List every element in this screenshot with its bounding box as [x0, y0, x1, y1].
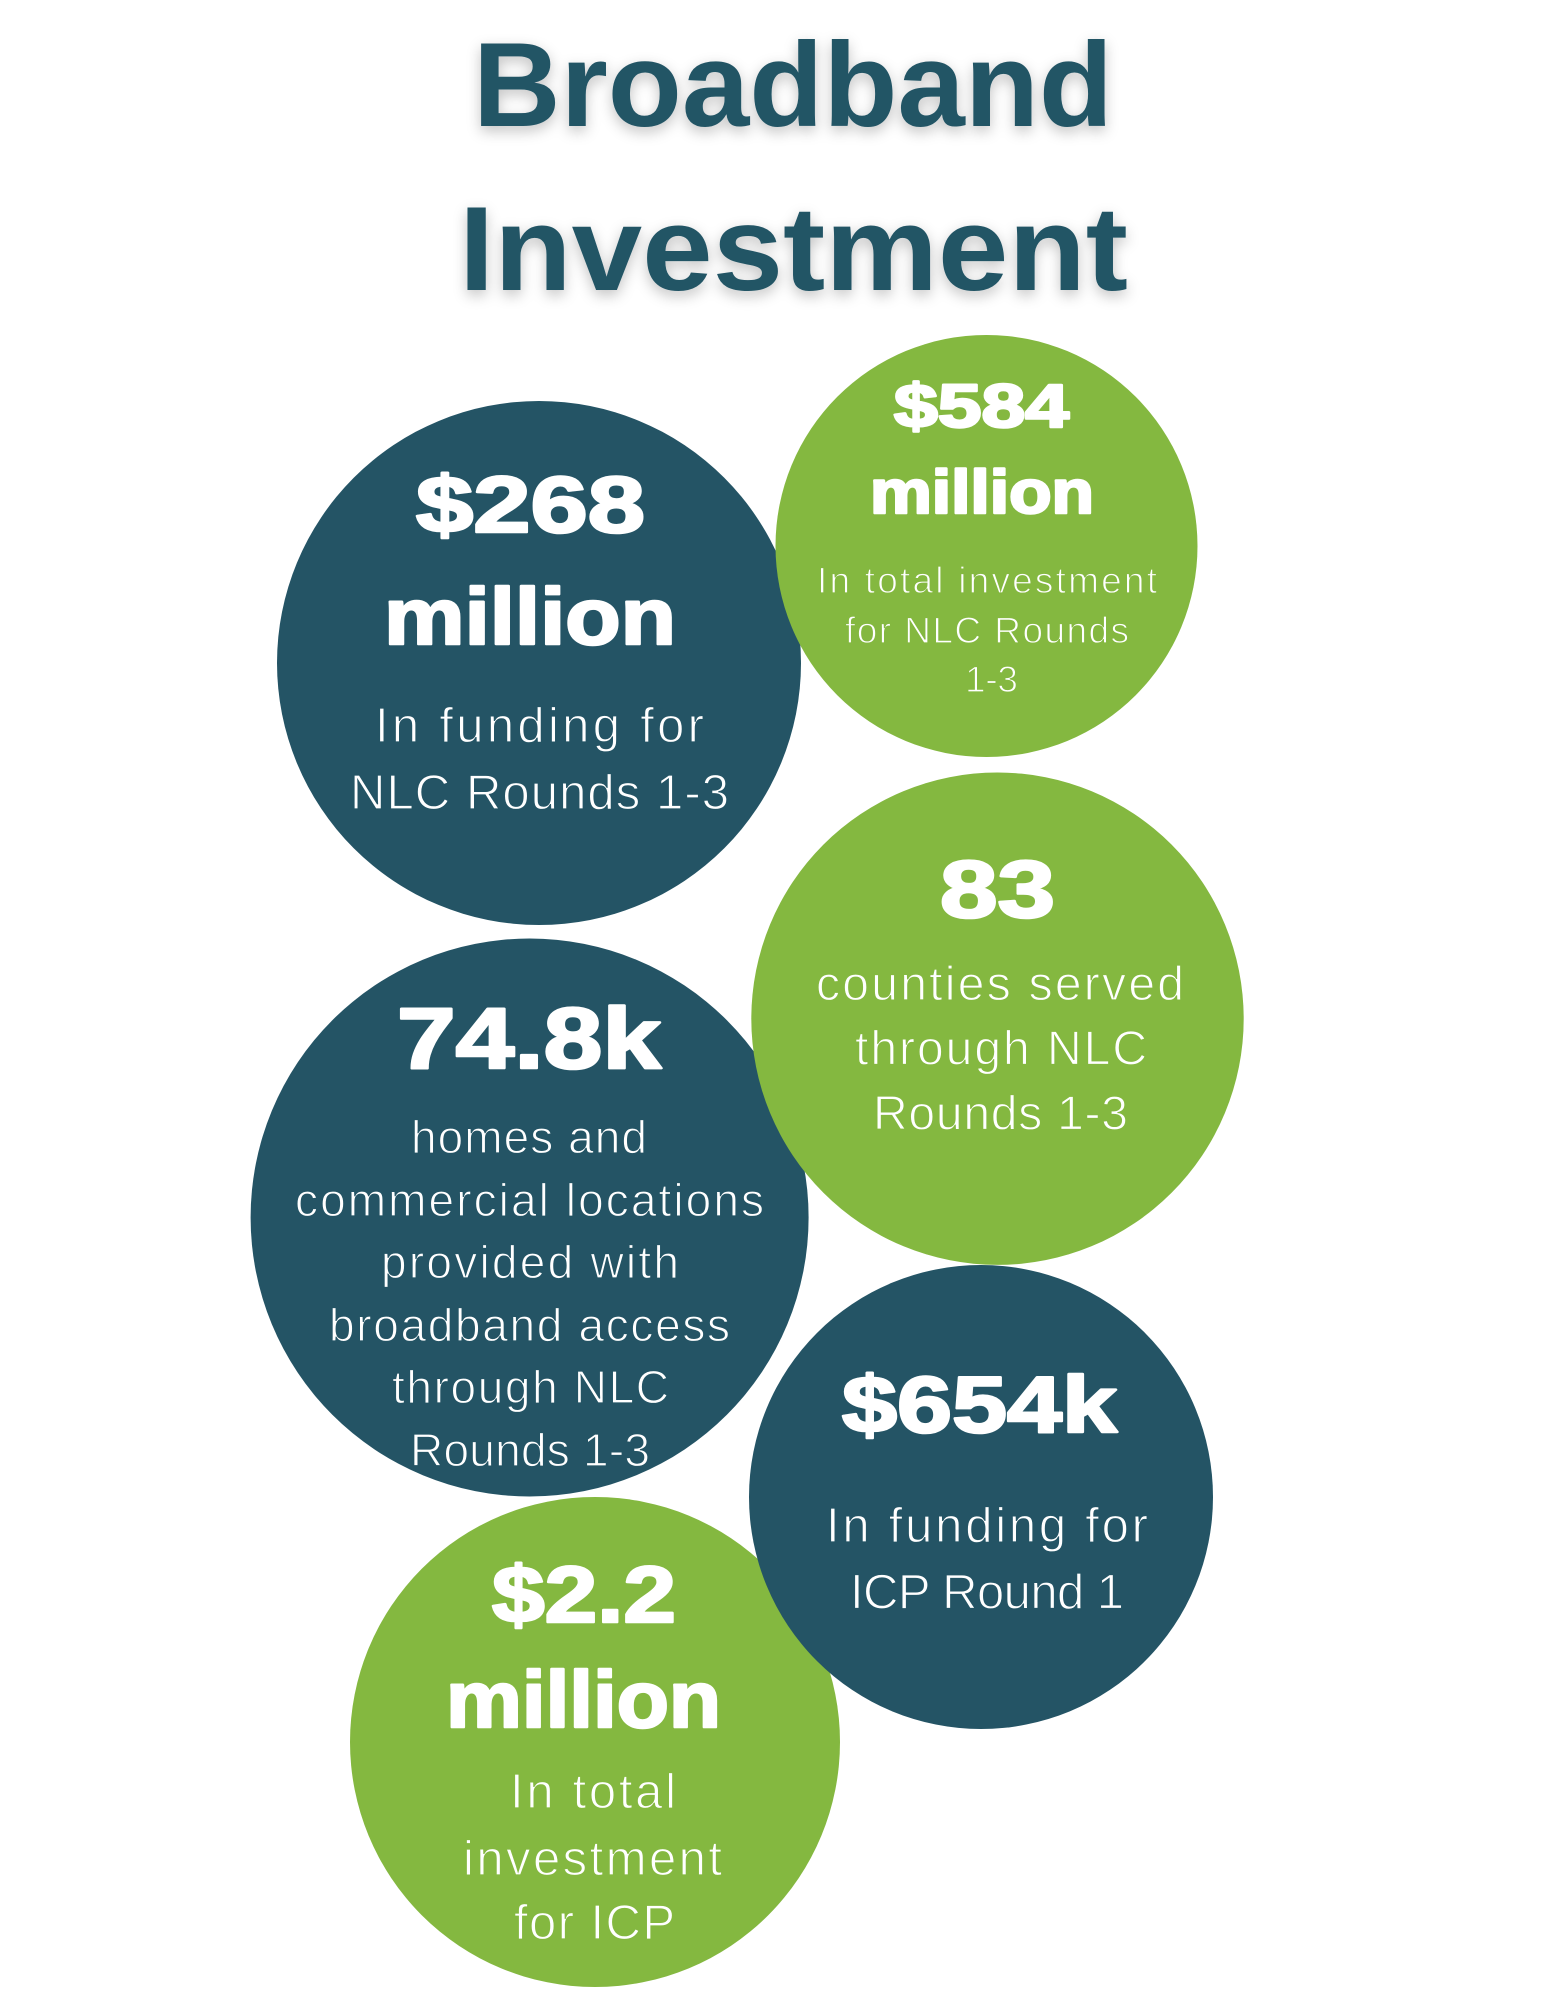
- description: total investment for ICP: for ICP: [514, 1896, 675, 1950]
- description: homes and commercial locations: Rounds 1-3: [410, 1424, 650, 1476]
- description: total investment for NLC rounds: [817, 560, 1158, 700]
- description: counties served through NLC rounds: [816, 958, 1184, 1140]
- description: funding for NLC rounds: NLC Rounds 1-3: [350, 766, 729, 820]
- panel: 83 counties served: [751, 772, 1244, 1265]
- stat: $2.2 million: million: [446, 1655, 721, 1744]
- description: counties served through NLC rounds: Rounds 1-3: [873, 1088, 1128, 1140]
- description: total investment for ICP: In total: [510, 1765, 676, 1819]
- title: Broadband: [473, 18, 1113, 152]
- stat: $2.2 million: $2.2: [492, 1550, 676, 1639]
- description: counties served through NLC rounds: through NLC: [855, 1022, 1147, 1076]
- title: Investment: [459, 182, 1128, 316]
- description: homes and commercial locations: broadband access: [329, 1299, 730, 1351]
- description: funding for NLC rounds: [350, 699, 729, 820]
- description: homes and commercial locations: through NLC: [392, 1361, 669, 1413]
- stat: 74.8k: 74.8k: [397, 991, 661, 1087]
- title: [459, 18, 1128, 316]
- description: total investment for NLC rounds: 1-3: [965, 659, 1018, 700]
- description: funding for ICP round 1: [826, 1499, 1148, 1620]
- description: funding for ICP round 1: ICP Round 1: [850, 1566, 1124, 1620]
- description: total investment for ICP: investment: [463, 1832, 722, 1886]
- description: total investment for NLC rounds: In total investment: [817, 560, 1158, 601]
- stat: $584 million: $584: [894, 372, 1069, 440]
- panel: $2.2 million total investment for ICP: [350, 1497, 840, 1987]
- description: homes and commercial locations: [295, 1111, 764, 1476]
- description: funding for NLC rounds: In funding for: [375, 699, 704, 753]
- stat: $2.2 million: [446, 1550, 721, 1744]
- stat: 83: 83: [940, 845, 1055, 935]
- description: total investment for ICP: [463, 1765, 722, 1950]
- description: homes and commercial locations: commercial locations: [295, 1174, 764, 1226]
- stat: $654k: $654k: [842, 1360, 1118, 1449]
- stat: $268 million: $268: [416, 460, 645, 549]
- panel: $654k funding for ICP: [749, 1265, 1213, 1729]
- stat: $268 million: million: [384, 572, 676, 661]
- description: funding for ICP round 1: In funding for: [826, 1499, 1148, 1553]
- description: homes and commercial locations: provided with: [381, 1236, 679, 1288]
- description: total investment for NLC rounds: for NLC Rounds: [845, 610, 1129, 651]
- panel: $268 million funding: [277, 401, 801, 925]
- stat: $268 million: [384, 460, 676, 661]
- stat: $584 million: million: [870, 458, 1094, 526]
- stat: $584 million: [870, 372, 1094, 526]
- panel: $584 million total investment: [776, 335, 1198, 757]
- description: counties served through NLC rounds: counties served: [816, 958, 1184, 1011]
- panel: 74.8k homes and locations: [251, 938, 809, 1496]
- description: homes and commercial locations: homes and: [411, 1111, 647, 1163]
